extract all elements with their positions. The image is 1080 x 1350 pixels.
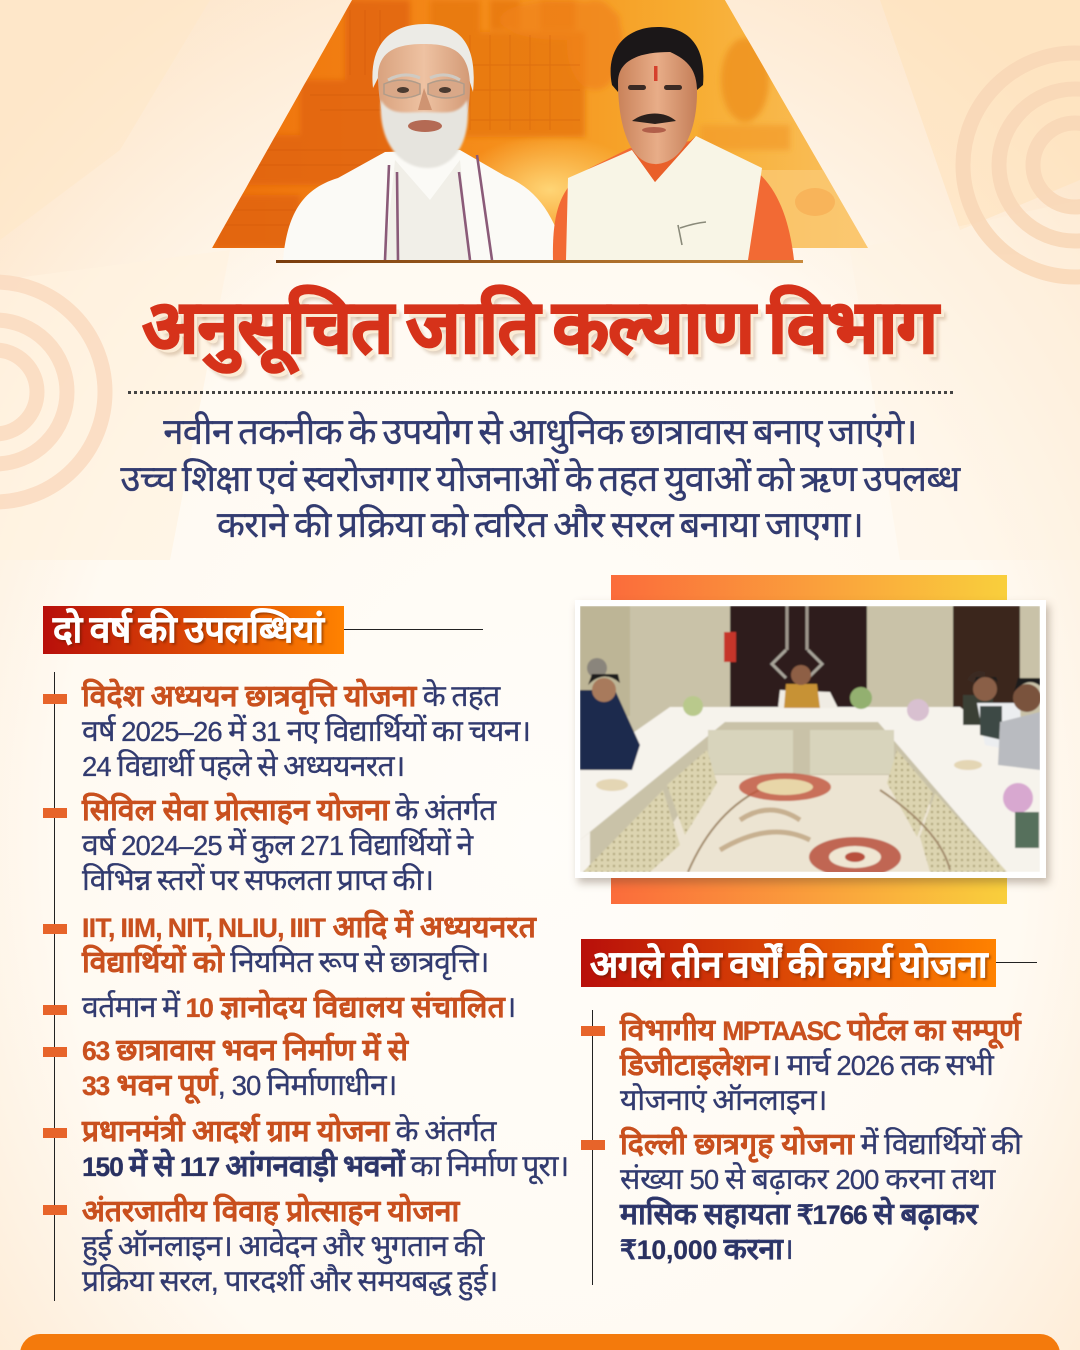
table	[580, 707, 1040, 872]
achievement 1: 24 विद्यार्थी पहले से अध्ययनरत।	[82, 750, 405, 783]
plan item 2: मासिक सहायता ₹1766 से बढ़ाकर	[620, 1198, 978, 1231]
achievement 5	[43, 1032, 410, 1104]
heading: action plan: अगले तीन वर्षों की कार्य योजना	[590, 944, 987, 985]
top gradient bar	[611, 575, 1007, 600]
header illustration: temple triangle with two portraits	[212, 0, 868, 263]
achievement 2: विभिन्न स्तरों पर सफलता प्राप्त की।	[82, 864, 434, 897]
people	[587, 658, 607, 678]
achievement 4: वर्तमान में 10 ज्ञानोदय विद्यालय संचालित।	[82, 991, 516, 1024]
achievement 2: सिविल सेवा प्रोत्साहन योजना के अंतर्गत	[82, 794, 496, 827]
plan item 1: योजनाएं ऑनलाइन।	[620, 1084, 827, 1117]
achievement 5: 63 छात्रावास भवन निर्माण में से	[82, 1034, 408, 1067]
achievement 3: IIT, IIM, NIT, NLIU, IIIT आदि में अध्ययनरत	[82, 911, 536, 944]
intro text: उच्च शिक्षा एवं स्वरोजगार योजनाओं के तहत युवाओं को ऋण उपलब्ध	[120, 458, 960, 499]
achievement 2: वर्ष 2024–25 में कुल 271 विद्यार्थियों ने	[82, 829, 473, 862]
plan item 1: विभागीय MPTAASC पोर्टल का सम्पूर्ण	[620, 1014, 1021, 1047]
achievement 1: विदेश अध्ययन छात्रवृत्ति योजना के तहत	[82, 680, 500, 713]
plan item 2: ₹10,000 करना।	[620, 1233, 793, 1266]
panel: three-year action plan	[581, 939, 1037, 1285]
panel: two-year achievements	[43, 606, 568, 1301]
plan item 1: डिजीटाइलेशन। मार्च 2026 तक सभी	[620, 1049, 993, 1082]
plan item 1	[581, 1012, 1022, 1117]
base line	[276, 260, 803, 263]
bottom gradient bar	[611, 878, 1007, 904]
portrait: right figure	[553, 27, 794, 260]
intro text: नवीन तकनीक के उपयोग से आधुनिक छात्रावास बनाए जाएंगे।	[163, 411, 917, 452]
panel: meeting photo	[573, 575, 1054, 904]
carpet	[650, 774, 932, 872]
temple backdrop triangle	[212, 0, 870, 248]
heading: achievements: दो वर्ष की उपलब्धियां	[53, 609, 324, 650]
intro text	[120, 411, 961, 545]
plan item 2	[581, 1126, 1022, 1266]
achievement 2	[43, 792, 497, 897]
achievement 7	[43, 1194, 498, 1301]
achievement 7: अंतरजातीय विवाह प्रोत्साहन योजना	[82, 1195, 459, 1228]
portrait: left figure	[283, 24, 567, 260]
dotted divider	[128, 391, 953, 394]
plan item 2: संख्या 50 से बढ़ाकर 200 करना तथा	[620, 1163, 995, 1196]
achievement 3: विद्यार्थियों को नियमित रूप से छात्रवृत्ति।	[82, 946, 489, 979]
achievement 6: 150 में से 117 आंगनवाड़ी भवनों का निर्माण पूरा।	[82, 1150, 568, 1183]
achievement 3	[43, 910, 537, 980]
plan item 2: दिल्ली छात्रगृह योजना में विद्यार्थियों की	[620, 1128, 1021, 1161]
achievement 7: प्रक्रिया सरल, पारदर्शी और समयबद्ध हुई।	[82, 1265, 498, 1298]
achievement 7: हुई ऑनलाइन। आवेदन और भुगतान की	[82, 1230, 484, 1263]
achievement 5: 33 भवन पूर्ण, 30 निर्माणाधीन।	[82, 1069, 397, 1102]
achievement 6	[43, 1114, 568, 1184]
intro text: कराने की प्रक्रिया को त्वरित और सरल बनाया जाएगा।	[217, 504, 863, 545]
title: अनुसूचित जाति कल्याण विभाग	[143, 287, 937, 368]
photo frame: meeting room illustration	[575, 600, 1046, 878]
achievement 6: प्रधानमंत्री आदर्श ग्राम योजना के अंतर्गत	[82, 1115, 496, 1148]
footer bar	[20, 1334, 1060, 1350]
achievement 1: वर्ष 2025–26 में 31 नए विद्यार्थियों का चयन।	[82, 715, 531, 748]
achievement 1	[43, 678, 531, 783]
